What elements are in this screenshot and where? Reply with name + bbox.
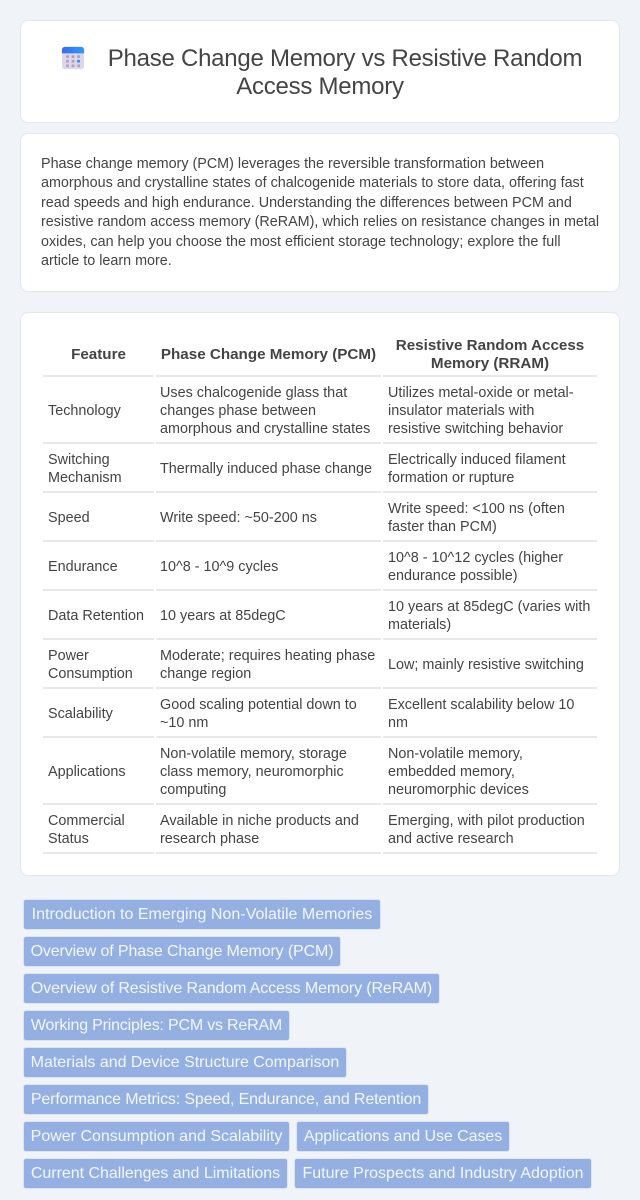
panel: comparison table: Non-volatile memory, embedded memory, neuromorphic devices [388,746,529,798]
panel: title card [20,20,620,123]
title: Access Memory [236,73,404,100]
tag: future: Future Prospects and Industry Adoption [302,1165,584,1182]
title: Phase Change Memory vs Resistive Random [108,45,582,72]
row: switching mechanism: Switching Mechanism [48,452,122,486]
panel: comparison table: Write speed: <100 ns (often faster than PCM) [388,501,565,535]
tag: power: Power Consumption and Scalability [31,1128,282,1145]
row: applications: Applications [48,764,126,780]
row: scalability: Scalability [48,706,113,722]
panel: comparison table: Moderate; requires heating phase change region [160,648,375,682]
tag: materials: Materials and Device Structure Comparison [31,1054,339,1071]
panel: comparison table: Write speed: ~50-200 ns [160,510,317,526]
panel: comparison table: Excellent scalability below 10 nm [388,697,574,731]
tag: materials [23,1047,347,1078]
table header: RRAM: Resistive Random Access Memory (RRAM) [396,337,584,372]
intro paragraph: Phase change memory (PCM) leverages the reversible transformation between amorphous and crystalline states of chalcogenide materials to store data, offering fast read speeds and high endurance. Understanding the differences between PCM and resistive random access memory (ReRAM), which relies on resistance changes in metal oxides, can help you choose the most efficient storage technology; explore the full article to learn more. [41,156,599,269]
panel: introduction [20,133,620,292]
row: technology: Technology [48,403,121,419]
panel: topic tags [23,899,592,1189]
tag: PCM overview: Overview of Phase Change Memory (PCM) [31,943,333,960]
panel: comparison table: Electrically induced filament formation or rupture [388,452,566,486]
panel: comparison table: Available in niche products and research phase [160,813,359,847]
panel: comparison table: 10 years at 85degC [160,608,286,624]
row: commercial status: Commercial Status [48,813,125,847]
panel: comparison table: Uses chalcogenide glass that changes phase between amorphous and crystalline states [160,385,370,437]
tag: challenges: Current Challenges and Limitations [31,1165,280,1182]
tag: working principles [23,1010,290,1041]
tag: introduction [23,899,381,930]
tag: performance [23,1084,429,1115]
table header: feature: Feature [71,346,126,363]
tag: future [294,1158,592,1189]
panel: comparison table: 10 years at 85degC (varies with materials) [388,599,590,633]
panel: comparison table: Good scaling potential down to ~10 nm [160,697,357,731]
tag: performance: Performance Metrics: Speed, Endurance, and Retention [31,1091,421,1108]
tag: power [23,1121,290,1152]
tag: ReRAM overview: Overview of Resistive Random Access Memory (ReRAM) [31,980,432,997]
panel: comparison table: 10^8 - 10^12 cycles (higher endurance possible) [388,550,563,584]
panel: comparison table: Low; mainly resistive switching [388,657,584,673]
title [108,45,582,100]
tag: working principles: Working Principles: PCM vs ReRAM [31,1017,282,1034]
panel: comparison table: Non-volatile memory, storage class memory, neuromorphic computing [160,746,347,798]
panel: comparison table: 10^8 - 10^9 cycles [160,559,278,575]
row: speed: Speed [48,510,90,526]
row: endurance: Endurance [48,559,118,575]
panel: comparison table: Utilizes metal-oxide or metal- insulator materials with resistive switching behavior [388,385,574,437]
panel: comparison table: Thermally induced phase change [160,461,372,477]
tag: ReRAM overview [23,973,440,1004]
tag: applications: Applications and Use Cases [304,1128,502,1145]
tag: PCM overview [23,936,341,967]
tag: challenges [23,1158,288,1189]
table header: PCM: Phase Change Memory (PCM) [161,346,376,363]
panel: comparison table [20,312,620,876]
tag: applications [296,1121,510,1152]
panel: comparison table: Emerging, with pilot production and active research [388,813,585,847]
row: data retention: Data Retention [48,608,144,624]
row: power consumption: Power Consumption [48,648,133,682]
tag: introduction: Introduction to Emerging Non-Volatile Memories [32,906,372,923]
icon: calendar [62,46,84,70]
